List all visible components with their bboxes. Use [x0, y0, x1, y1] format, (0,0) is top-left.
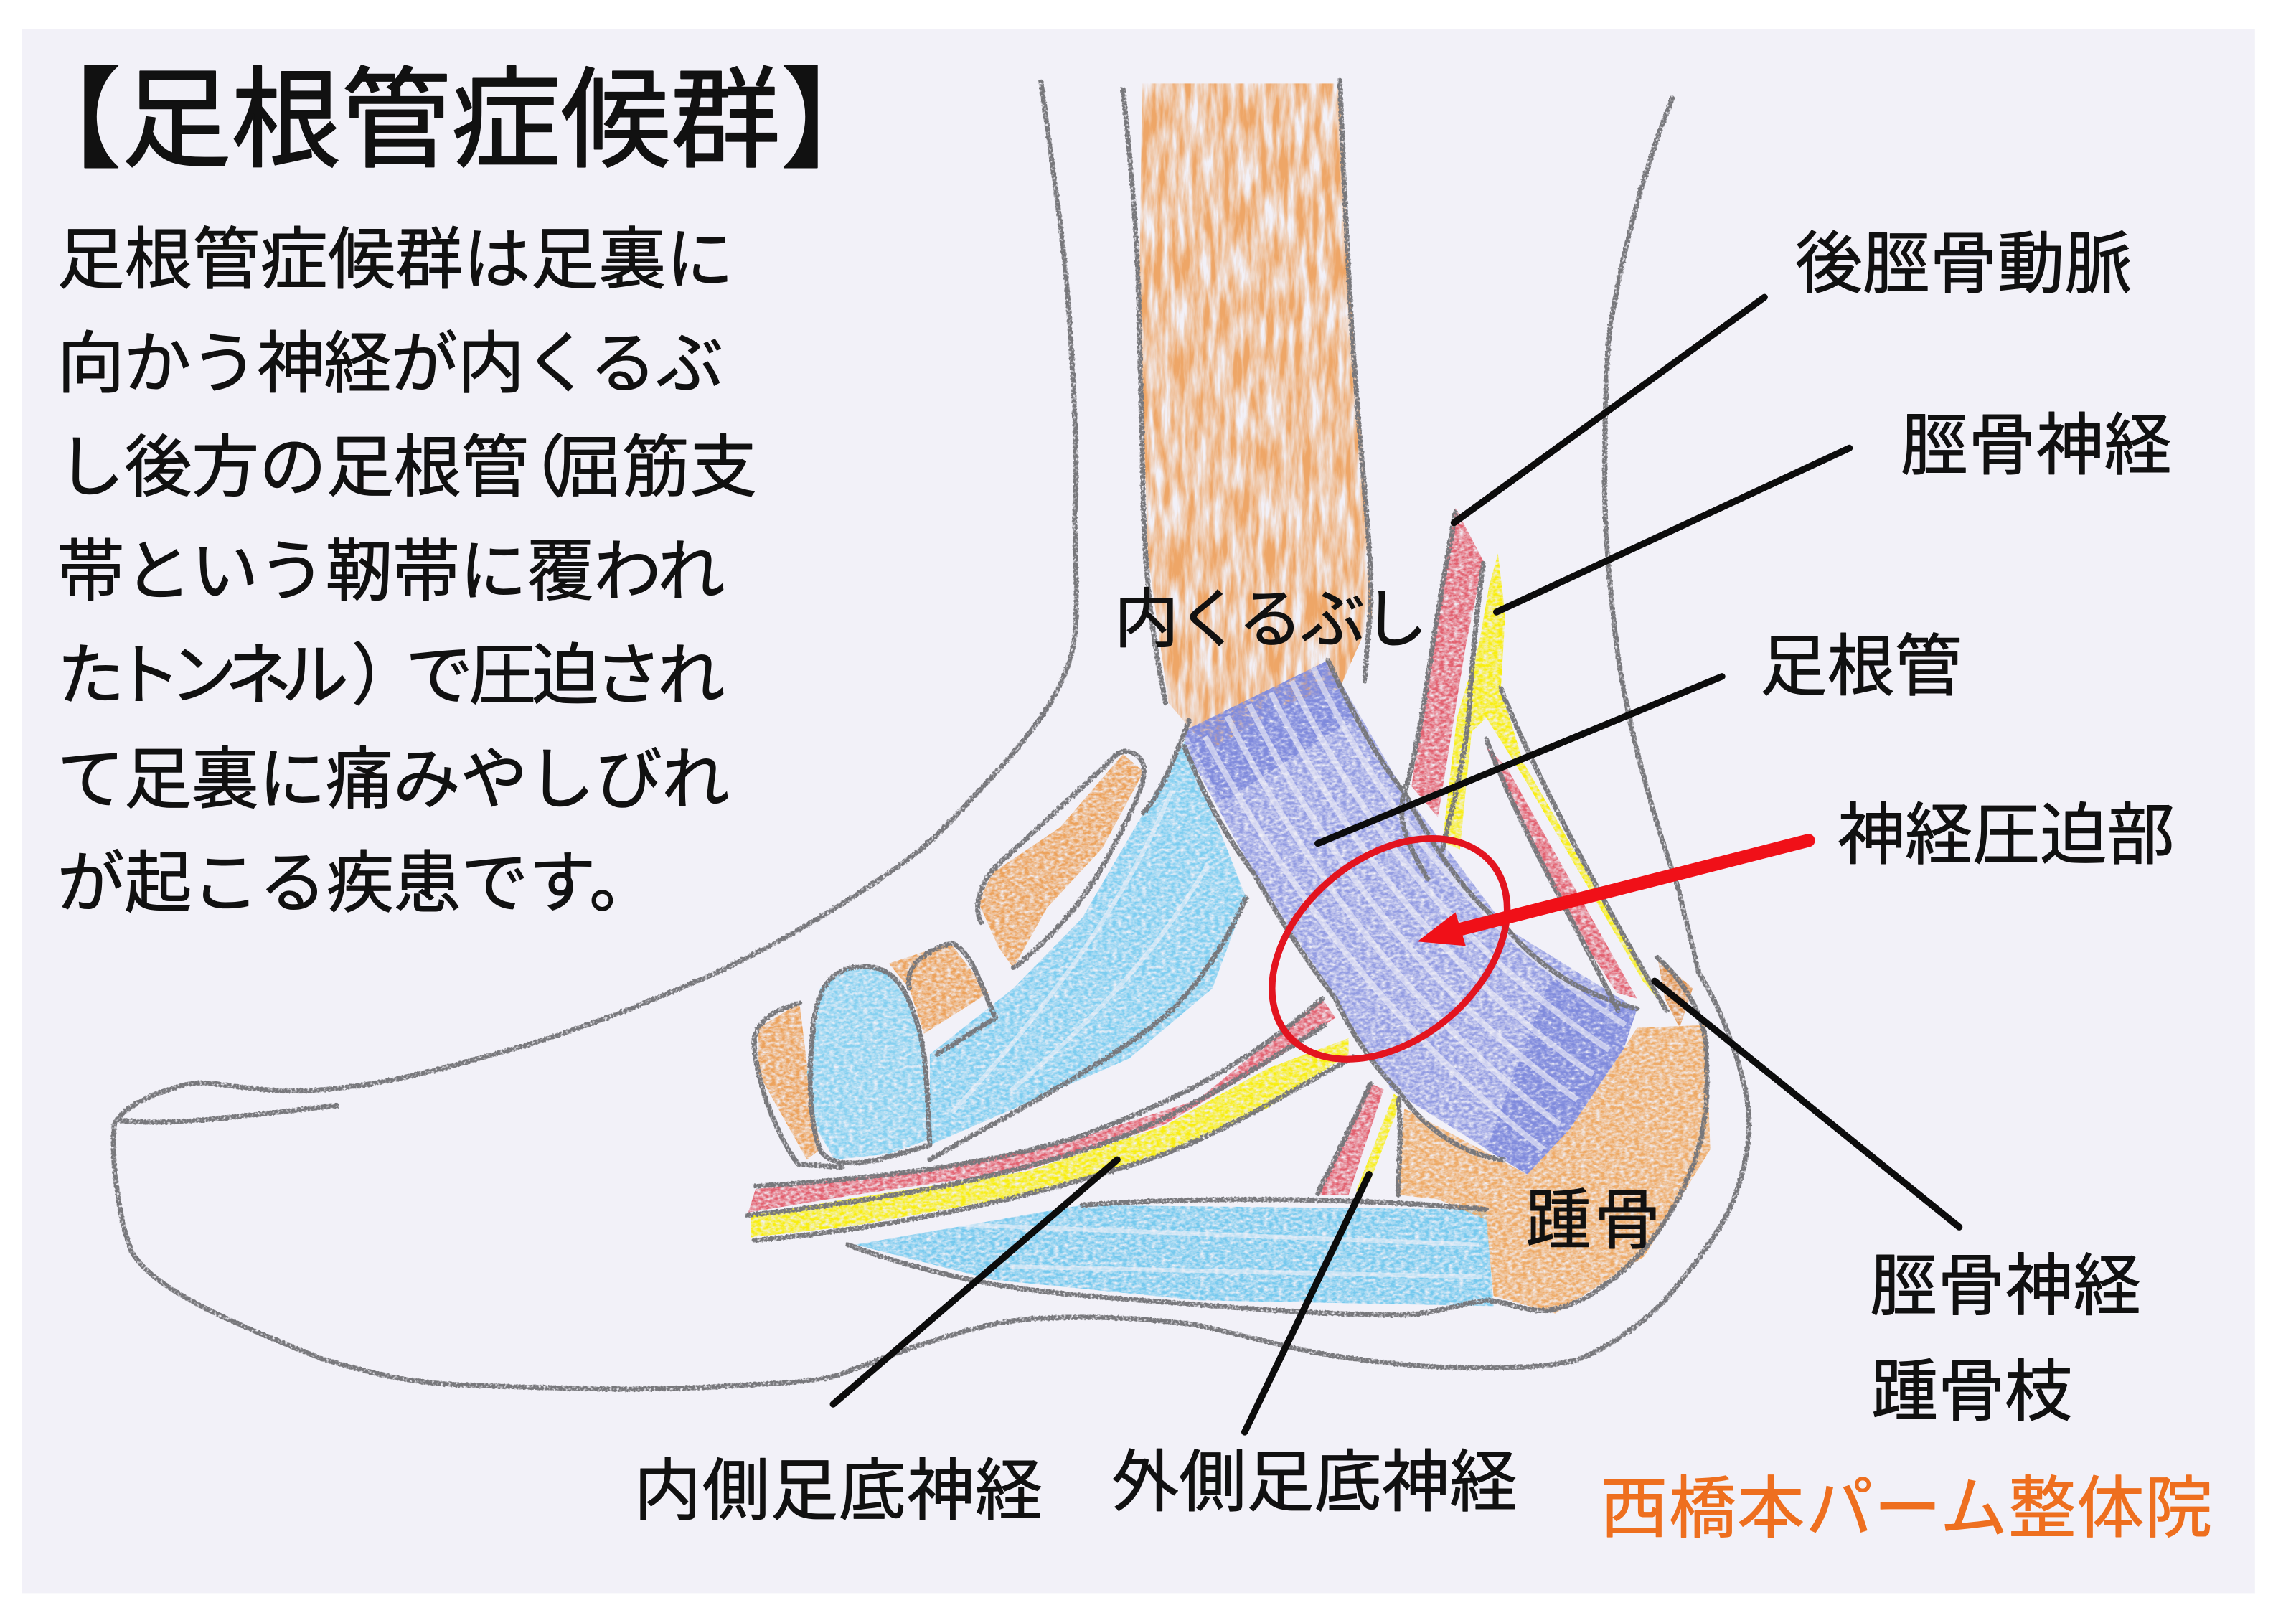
label: posterior tibial artery: 後脛骨動脈 — [1795, 226, 2132, 301]
tibial nerve — [1442, 553, 1665, 1007]
arrow: nerve compression pointer — [1418, 840, 1808, 946]
calcaneus bone fill — [1397, 1025, 1711, 1314]
toe muscle fill — [806, 968, 930, 1159]
illustration: foot anatomy — [113, 80, 1959, 1432]
lower artery — [748, 999, 1335, 1213]
tendon streaks — [1205, 668, 1625, 1149]
description text: 帯という靭帯に覆われ — [57, 534, 725, 609]
description text: 向かう神経が内くるぶ — [57, 326, 723, 401]
retinaculum dark ends — [1185, 660, 1637, 1175]
nerve and artery bundle outlines — [756, 999, 1322, 1186]
label: calcaneus: 踵骨 — [1526, 1185, 1660, 1258]
tibia bone fill — [1139, 83, 1372, 747]
description text: 屈筋支 — [555, 430, 757, 505]
tibia right line — [1340, 80, 1370, 681]
plantar muscle fill — [855, 1205, 1494, 1306]
posterior vessels outlines — [1401, 512, 1456, 878]
artery branch — [1486, 747, 1637, 999]
leader: tarsal tunnel — [1318, 677, 1722, 843]
description text: 足根管症候群は足裏に — [57, 222, 733, 297]
heel nerve branch tint — [1657, 958, 1693, 1028]
lateral branch artery — [1318, 1083, 1384, 1195]
toe bones fill — [758, 754, 1144, 1159]
midfoot muscle fill — [930, 741, 1246, 1145]
label: tarsal tunnel: 足根管 — [1760, 629, 1962, 704]
description text — [57, 222, 757, 921]
lateral plantar nerve — [1356, 1093, 1401, 1192]
posterior tibial artery — [1411, 508, 1483, 817]
label: calcaneal branch of tibial nerve: 脛骨神経 — [1870, 1248, 2141, 1323]
label: lateral plantar nerve: 外側足底神経 — [1111, 1444, 1517, 1520]
leader: medial plantar nerve — [833, 1159, 1117, 1404]
retinaculum lower edge — [1185, 747, 1504, 1159]
muscle streaks — [908, 791, 1482, 1277]
description text: て足裏に痛みやしびれ — [57, 741, 729, 817]
leader: tibial nerve — [1497, 448, 1850, 612]
leader: posterior tibial artery — [1454, 297, 1764, 523]
compression zone ellipse — [1229, 794, 1550, 1104]
clinic name: 西橋本パーム整体院 — [1601, 1471, 2213, 1546]
label: calcaneal branch of tibial nerve: 踵骨枝 — [1871, 1353, 2072, 1429]
midfoot muscle edge — [930, 720, 1246, 1159]
leader: lateral plantar nerve — [1245, 1175, 1369, 1432]
retinaculum upper edge — [1328, 660, 1637, 1009]
label: nerve compression site: 神経圧迫部 — [1838, 797, 2175, 872]
label: calcaneal branch of tibial nerve — [1870, 1248, 2141, 1429]
description text: ） — [352, 637, 419, 712]
description text: たトンネル — [57, 637, 349, 712]
toe inner line — [117, 1106, 337, 1122]
leader: calcaneal branch — [1655, 981, 1959, 1227]
description text: が起こる疾患です。 — [57, 845, 657, 921]
tibia left line — [1123, 89, 1165, 703]
flexor retinaculum (tarsal tunnel) — [1185, 660, 1637, 1175]
heel bone and sole inner line — [848, 958, 1707, 1315]
label: tibial nerve: 脛骨神経 — [1901, 408, 2172, 483]
toe bone outlines — [908, 943, 996, 1054]
label: medial malleolus: 内くるぶし — [1114, 584, 1428, 656]
description text: で圧迫され — [405, 637, 725, 712]
description text: し後方の足根管 — [57, 430, 529, 505]
foot front and sole outline — [113, 82, 1749, 1389]
medial plantar nerve — [751, 1038, 1349, 1237]
leader lines — [833, 297, 1959, 1432]
label: medial plantar nerve: 内側足底神経 — [634, 1453, 1043, 1528]
pencil outlines — [113, 80, 1749, 1389]
description text: （ — [498, 430, 565, 505]
title: 【足根管症候群】 — [11, 59, 890, 182]
